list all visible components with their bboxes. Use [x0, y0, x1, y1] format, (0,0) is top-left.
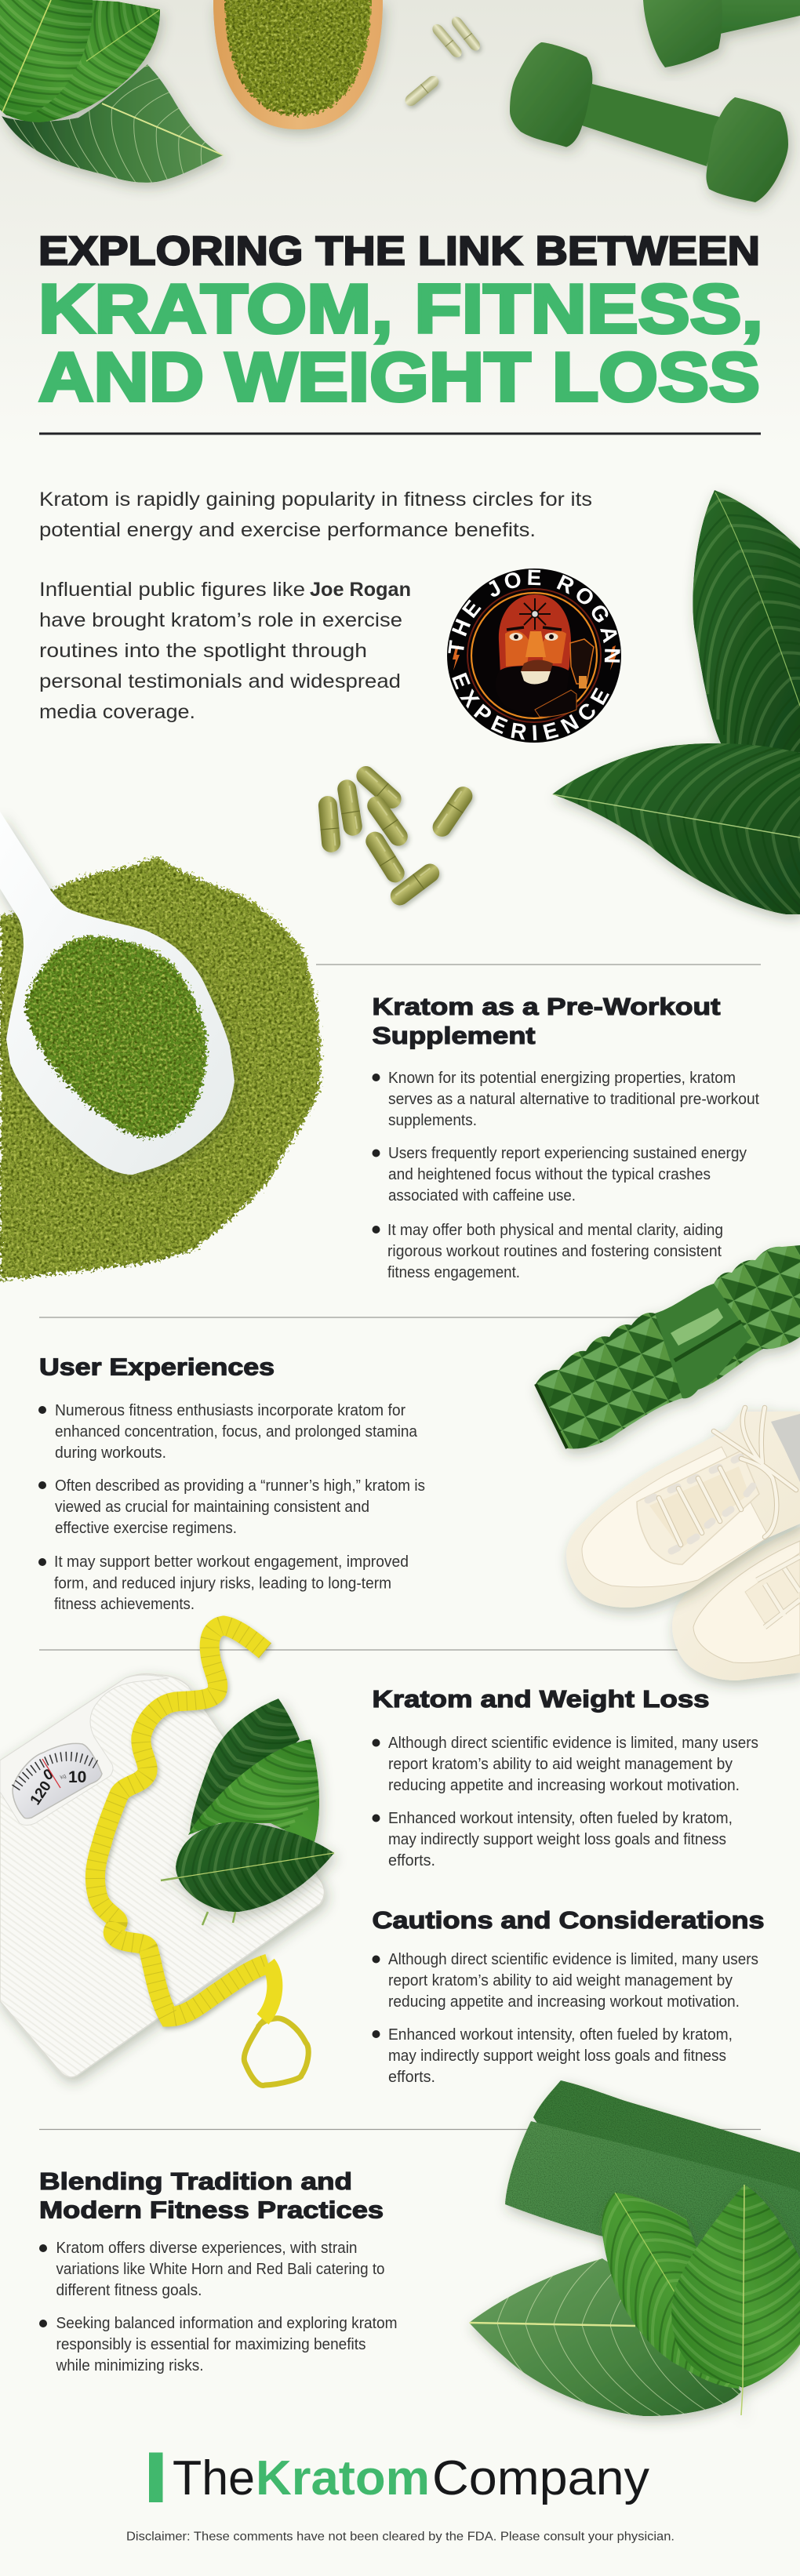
section: user experiences: form, and reduced injury risks, leading to long-term	[54, 1575, 391, 1592]
section: blending tradition and modern fitness practices: responsibly is essential for maximizing benefits	[56, 2336, 365, 2353]
section: blending tradition and modern fitness practices: variations like White Horn and Red Bali catering to	[56, 2261, 384, 2278]
image: top capsules	[402, 15, 482, 108]
section: kratom as a pre-workout supplement: Users frequently report experiencing sustained energy	[388, 1145, 747, 1162]
section: kratom and weight loss: efforts.	[388, 1852, 435, 1869]
section: user experiences: fitness achievements.	[54, 1596, 195, 1613]
section: blending tradition and modern fitness practices: Kratom offers diverse experiences, with strain	[56, 2240, 358, 2257]
image: green towel	[505, 2080, 800, 2274]
section: kratom and weight loss: Although direct scientific evidence is limited, many users	[388, 1735, 758, 1752]
image: kratom leaves bottom right	[468, 2185, 800, 2428]
scale dial: kg	[60, 1773, 67, 1781]
section: cautions and considerations: may indirectly support weight loss goals and fitness	[388, 2047, 726, 2065]
intro text: have brought kratom’s role in exercise	[39, 609, 402, 631]
divider lines	[39, 965, 761, 2130]
section: kratom as a pre-workout supplement: rigorous workout routines and fostering consistent	[387, 1243, 722, 1260]
intro text: Influential public figures like	[39, 579, 305, 601]
image: cream sneakers	[566, 1408, 800, 1680]
logo: The Joe Rogan Experience badge	[447, 569, 621, 743]
section: cautions and considerations: reducing appetite and increasing workout motivation.	[388, 1993, 740, 2011]
section: kratom and weight loss: Enhanced workout intensity, often fueled by kratom,	[388, 1810, 733, 1827]
logo: The Kratom Company	[149, 2451, 649, 2505]
section: cautions and considerations: efforts.	[388, 2069, 435, 2086]
section: user experiences: during workouts.	[55, 1444, 166, 1462]
title: AND WEIGHT LOSS	[38, 338, 760, 416]
section: user experiences: viewed as crucial for maintaining consistent and	[55, 1499, 369, 1516]
section: user experiences: User Experiences	[39, 1353, 275, 1380]
image: white spoon with powder	[0, 812, 235, 1175]
title: EXPLORING THE LINK BETWEEN	[38, 229, 760, 274]
intro text: media coverage.	[39, 701, 195, 723]
section: cautions and considerations	[372, 1906, 764, 2086]
image: yellow measuring tape	[95, 1626, 308, 2085]
image: top-left kratom leaves	[0, 0, 227, 194]
scale dial: 10	[68, 1768, 86, 1786]
intro text: Joe Rogan	[310, 579, 411, 601]
section: blending tradition and modern fitness practices: different fitness goals.	[56, 2282, 202, 2299]
intro text: Kratom is rapidly gaining popularity in fitness circles for its	[39, 489, 592, 510]
section: kratom and weight loss: may indirectly support weight loss goals and fitness	[388, 1831, 726, 1848]
logo: The Kratom Company: Company	[432, 2451, 649, 2505]
image: top-right dumbbell	[643, 0, 800, 67]
image: kratom powder pile	[0, 856, 321, 1280]
section: blending tradition and modern fitness practices: Seeking balanced information and exploring kratom	[56, 2315, 397, 2332]
logo: The Kratom Company: The	[173, 2451, 255, 2505]
section: blending tradition and modern fitness practices	[39, 2167, 397, 2374]
section: kratom and weight loss: report kratom’s ability to aid weight management by	[388, 1756, 733, 1773]
section: kratom as a pre-workout supplement: fitness engagement.	[387, 1264, 520, 1281]
scale dial: 0	[41, 1766, 56, 1784]
image: scattered kratom capsules	[318, 762, 476, 909]
section: user experiences	[38, 1353, 425, 1613]
scale dial	[13, 1743, 102, 1818]
section: cautions and considerations: report kratom’s ability to aid weight management by	[388, 1972, 733, 1989]
section: kratom and weight loss: reducing appetite and increasing workout motivation.	[388, 1777, 740, 1794]
section: blending tradition and modern fitness practices: Modern Fitness Practices	[39, 2196, 384, 2224]
title: KRATOM, FITNESS,	[38, 270, 763, 347]
section: kratom as a pre-workout supplement: Supplement	[372, 1022, 535, 1049]
logo: The Joe Rogan Experience badge: EXPERIENCE	[452, 673, 609, 740]
image: wooden bowl of kratom powder	[213, 0, 383, 129]
section: user experiences: Often described as providing a “runner’s high,” kratom is	[55, 1477, 425, 1495]
section: user experiences: Numerous fitness enthusiasts incorporate kratom for	[55, 1402, 405, 1419]
scale dial: 120	[27, 1778, 55, 1808]
section: kratom and weight loss: Kratom and Weight Loss	[372, 1685, 709, 1713]
image: three kratom leaves on scale	[160, 1699, 340, 1926]
section: kratom as a pre-workout supplement: Known for its potential energizing properties, kratom	[388, 1070, 736, 1087]
image: large dark kratom leaves right	[552, 490, 800, 926]
section: kratom as a pre-workout supplement: associated with caffeine use.	[388, 1187, 576, 1204]
logo: The Kratom Company: Kratom	[256, 2451, 430, 2505]
intro text	[39, 489, 592, 723]
section: kratom as a pre-workout supplement: Kratom as a Pre-Workout	[372, 993, 720, 1020]
section: blending tradition and modern fitness practices: Blending Tradition and	[39, 2167, 352, 2195]
section: kratom as a pre-workout supplement: supplements.	[388, 1112, 477, 1129]
image: green dumbbell	[510, 42, 788, 202]
disclaimer: Disclaimer: These comments have not been cleared by the FDA. Please consult your physician.	[126, 2530, 675, 2544]
image: white bathroom scale	[0, 1674, 325, 2077]
intro text: routines into the spotlight through	[39, 640, 367, 662]
section: kratom as a pre-workout supplement: serves as a natural alternative to traditional pre-workout	[388, 1091, 759, 1108]
intro text: potential energy and exercise performance benefits.	[39, 519, 536, 541]
section: kratom and weight loss	[372, 1685, 758, 1869]
section: cautions and considerations: Although direct scientific evidence is limited, many users	[388, 1951, 758, 1968]
section: user experiences: effective exercise regimens.	[55, 1520, 237, 1537]
section: cautions and considerations: Enhanced workout intensity, often fueled by kratom,	[388, 2026, 733, 2044]
section: user experiences: It may support better workout engagement, improved	[54, 1553, 409, 1571]
title	[38, 229, 763, 434]
section: kratom as a pre-workout supplement: and heightened focus without the typical crashes	[388, 1166, 711, 1183]
section: kratom as a pre-workout supplement	[372, 993, 759, 1281]
section: blending tradition and modern fitness practices: while minimizing risks.	[56, 2357, 204, 2374]
section: kratom as a pre-workout supplement: It may offer both physical and mental clarity, aiding	[387, 1222, 723, 1239]
section: cautions and considerations: Cautions and Considerations	[372, 1906, 764, 1934]
intro text: personal testimonials and widespread	[39, 670, 401, 692]
logo: The Joe Rogan Experience badge: THE JOE ROGAN	[448, 569, 620, 663]
image: green foam roller	[536, 1245, 800, 1448]
section: user experiences: enhanced concentration, focus, and prolonged stamina	[55, 1423, 418, 1441]
